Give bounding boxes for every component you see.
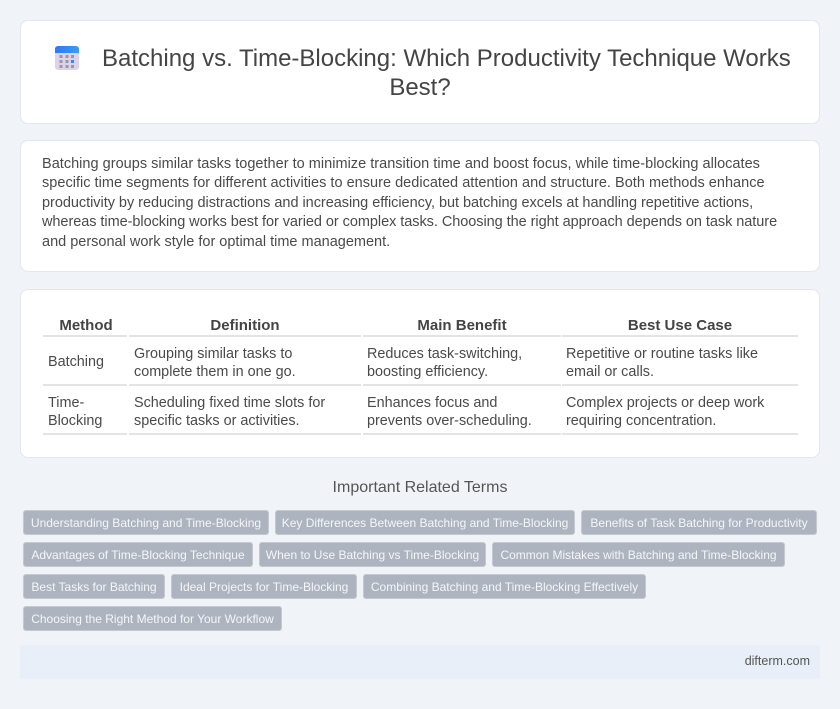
- row: batching: complete them in one go.: [134, 364, 296, 380]
- row: batching: Reduces task-switching,: [367, 346, 522, 362]
- comparison table panel: [20, 289, 820, 458]
- related terms tags: Key Differences Between Batching and Time-Blocking: [282, 516, 568, 530]
- related terms tags: When to Use Batching vs Time-Blocking: [266, 548, 479, 562]
- row: time-blocking: prevents over-scheduling.: [367, 413, 532, 429]
- header card: [20, 20, 820, 124]
- row: batching: boosting efficiency.: [367, 364, 488, 380]
- row: time-blocking: [48, 395, 764, 429]
- intro paragraph: Batching groups similar tasks together to minimize transition time and boost focus, while time-blocking allocates: [42, 156, 760, 172]
- row: time-blocking: Blocking: [48, 413, 102, 429]
- row: batching: email or calls.: [566, 364, 654, 380]
- related terms tags: Ideal Projects for Time-Blocking: [180, 580, 348, 594]
- row: batching: Repetitive or routine tasks like: [566, 346, 758, 362]
- intro text panel: [20, 140, 820, 272]
- intro paragraph: and personal work style for optimal time management.: [42, 234, 390, 250]
- related terms tags: Combining Batching and Time-Blocking Effectively: [371, 580, 638, 594]
- table header: [59, 317, 732, 334]
- table header: Definition: [210, 317, 280, 334]
- title: [102, 45, 791, 101]
- row: time-blocking: Enhances focus and: [367, 395, 497, 411]
- related terms tags: Best Tasks for Batching: [31, 580, 157, 594]
- table header: Best Use Case: [628, 317, 732, 334]
- related terms tags: Advantages of Time-Blocking Technique: [31, 548, 245, 562]
- footer brand: difterm.com: [745, 654, 810, 668]
- row: time-blocking: requiring concentration.: [566, 413, 716, 429]
- title: Batching vs. Time-Blocking: Which Productivity Technique Works: [102, 45, 791, 72]
- footer bar: [20, 645, 820, 679]
- related terms heading: Important Related Terms: [333, 479, 507, 496]
- row: time-blocking: specific tasks or activities.: [134, 413, 300, 429]
- related terms tags: Benefits of Task Batching for Productivity: [590, 516, 808, 530]
- intro paragraph: [42, 156, 777, 250]
- title: Best?: [389, 74, 451, 101]
- intro paragraph: whereas time-blocking works best for varied or complex tasks. Choosing the right approach depends on task nature: [42, 214, 777, 230]
- row: time-blocking: Scheduling fixed time slots for: [134, 395, 325, 411]
- icon: calendar: [55, 46, 79, 70]
- intro paragraph: productivity by reducing distractions and increasing efficiency, but batching excels at handling repetitive actions,: [42, 194, 753, 210]
- row: time-blocking: Complex projects or deep work: [566, 395, 764, 411]
- related terms tags: [23, 510, 817, 631]
- row: batching: [48, 346, 758, 380]
- table header: Main Benefit: [417, 317, 507, 334]
- row: time-blocking: Time-: [48, 395, 84, 411]
- related terms tags: Understanding Batching and Time-Blocking: [31, 516, 261, 530]
- row: batching: Batching: [48, 354, 104, 370]
- related terms tags: Common Mistakes with Batching and Time-Blocking: [500, 548, 777, 562]
- related terms tags: Choosing the Right Method for Your Workflow: [31, 612, 274, 626]
- table header: Method: [59, 317, 113, 334]
- row: batching: Grouping similar tasks to: [134, 346, 292, 362]
- intro paragraph: specific time segments for different activities to ensure dedicated attention and structure. Both methods enhance: [42, 175, 765, 191]
